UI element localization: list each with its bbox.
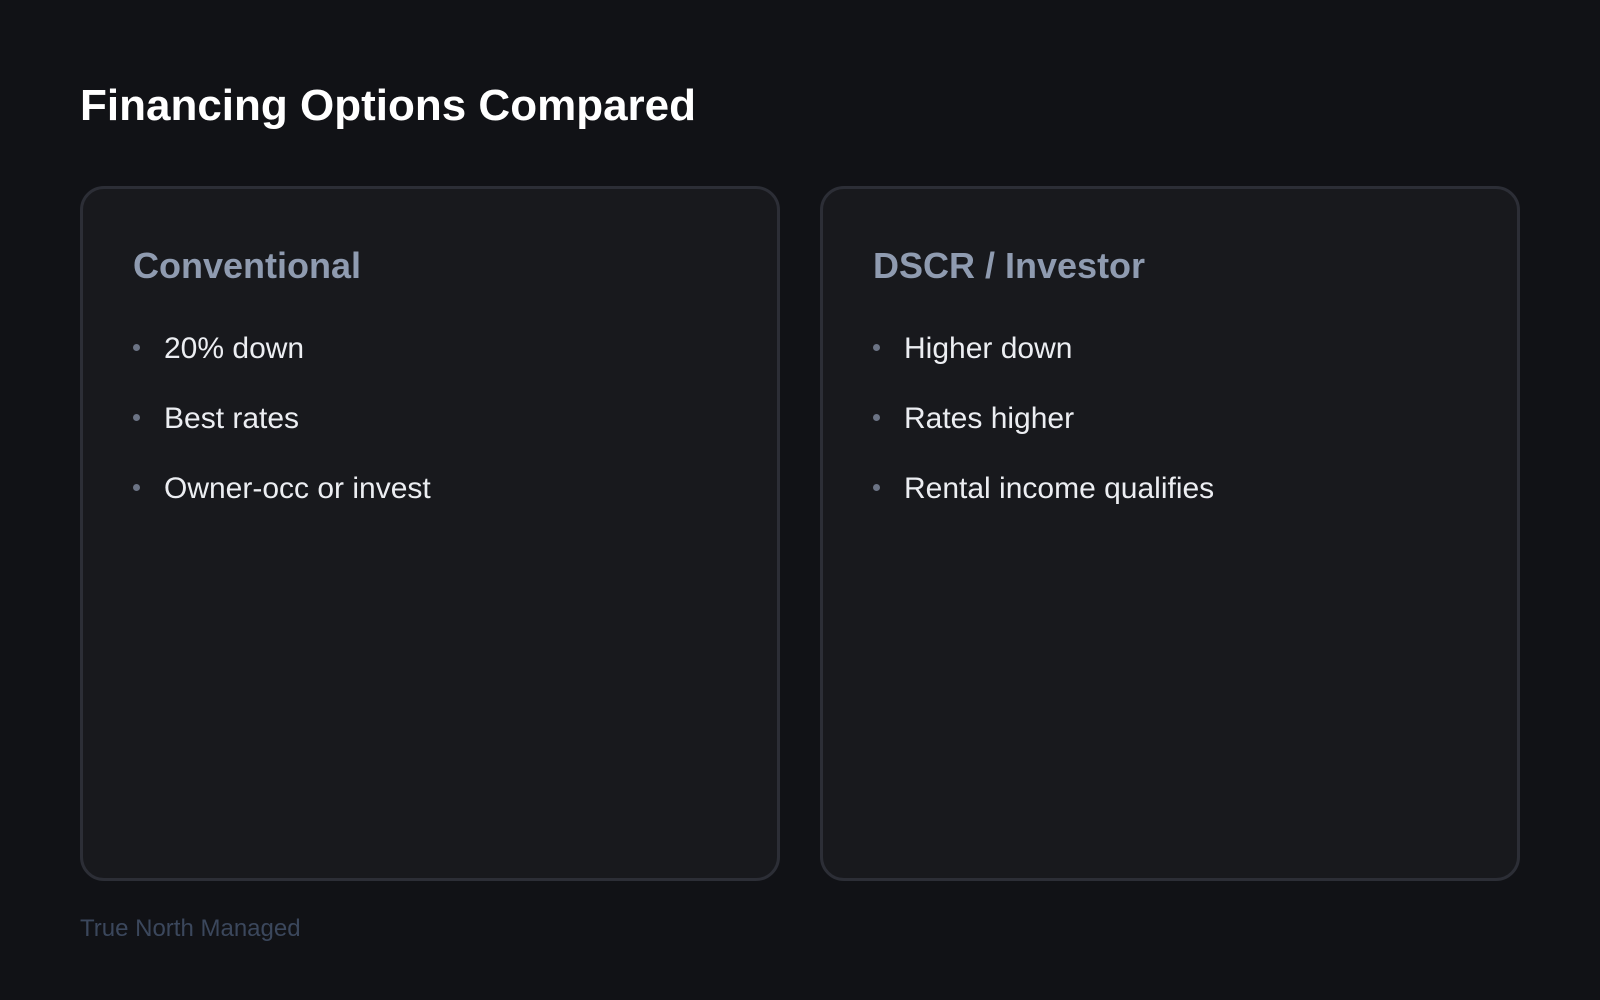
panel: conventional <box>80 186 780 881</box>
bullet: rental income: Rental income qualifies <box>904 472 1214 505</box>
bullet: best rates: Best rates <box>164 402 299 435</box>
heading: conventional: Conventional <box>133 245 361 286</box>
panel: dscr investor <box>820 186 1520 881</box>
heading: dscr: DSCR / Investor <box>873 245 1145 286</box>
title: Financing Options Compared <box>80 81 696 130</box>
bullet: owner-occ: Owner-occ or invest <box>164 472 431 505</box>
bullet: rates higher: Rates higher <box>904 402 1074 435</box>
bullet: higher down: Higher down <box>904 332 1072 365</box>
bullet: 20% down: 20% down <box>164 332 304 365</box>
footer: True North Managed <box>80 915 301 942</box>
